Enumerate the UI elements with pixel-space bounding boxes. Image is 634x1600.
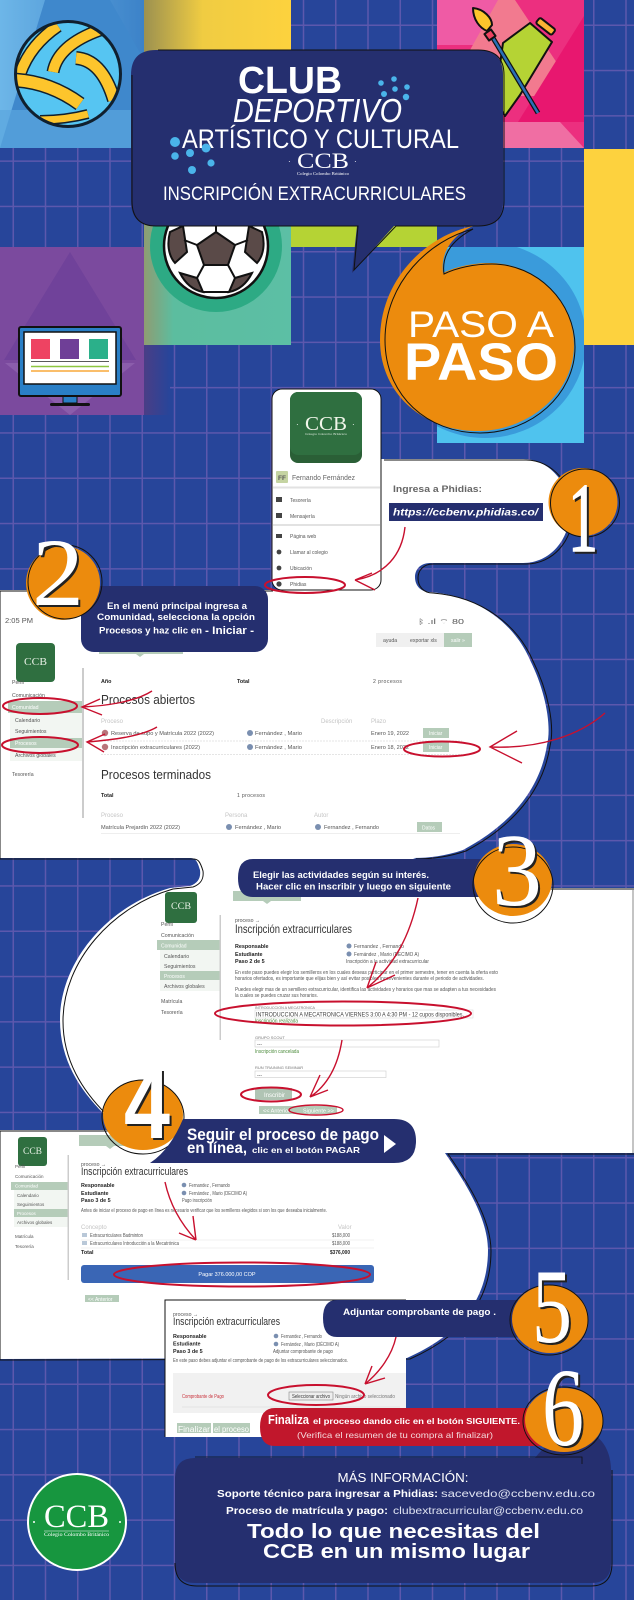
closing slogan: Todo lo que necesitas del — [247, 1521, 540, 1543]
footer contact panel — [175, 1430, 612, 1586]
finished processes: Proceso — [101, 813, 124, 819]
paso a paso bubble — [380, 226, 575, 433]
pay button: Pagar 376.000,00 COP — [198, 1272, 256, 1278]
upload box: Ningún archivo seleccionado — [335, 1394, 395, 1400]
step 2: screenshot: 2:05 PM — [5, 616, 33, 625]
step 6 number: 6 — [542, 1347, 584, 1470]
step 3: red marks — [215, 898, 471, 1115]
step 6: red instruction bar: (Verifica el resumen de tu compra al finalizar) — [297, 1430, 493, 1440]
sidebar: Matrícula — [161, 999, 182, 1005]
sidebar: Seguimientos — [15, 729, 47, 735]
step 6 number — [523, 1347, 603, 1472]
finished processes: 1 procesos — [237, 793, 265, 799]
payment details: Responsable — [81, 1183, 115, 1189]
step 5: red marks — [268, 1337, 396, 1405]
step 5: screenshot — [165, 1300, 406, 1437]
finished processes: Datos — [422, 826, 436, 832]
step 4 number: 4 — [124, 1048, 170, 1160]
form selects: RUN TRAINING SEMINAR — [255, 1065, 303, 1070]
CCB logo: CCB — [44, 1499, 109, 1535]
sidebar: Tesorería — [12, 772, 34, 778]
header speech bubble — [131, 50, 504, 273]
payment details: Paso 3 de 5 — [81, 1198, 111, 1204]
payment table: Extracurriculares Badminton — [90, 1233, 143, 1239]
finished processes: Fernandez , Fernando — [324, 825, 379, 831]
sidebar: Comunidad — [161, 944, 187, 950]
sidebar: Perfil — [12, 680, 24, 686]
icon: soccer ball — [164, 194, 268, 298]
step 2 number — [26, 519, 102, 628]
payment details: Fernández , Mario (DECIMO A) — [189, 1191, 247, 1197]
step 4: instruction bar: en línea, — [187, 1140, 247, 1157]
decorative dots — [170, 76, 410, 174]
step 4: red marks — [114, 1182, 370, 1286]
form header — [235, 918, 429, 965]
form selects: Inscripción cancelada — [255, 1049, 299, 1055]
sidebar: Tesorería — [15, 1244, 34, 1249]
phone logo: · — [352, 420, 355, 429]
contact lines — [217, 1489, 596, 1517]
sidebar: Tesorería — [161, 1010, 183, 1016]
form header: proceso → — [235, 918, 260, 924]
payment details — [81, 1162, 327, 1214]
payment details: Fernandez , Fernando — [189, 1183, 230, 1189]
open processes: Inscripción extracurriculares (2022) — [111, 745, 200, 751]
step 4: instruction bar — [150, 1119, 416, 1163]
sidebar: Archivos globales — [15, 753, 56, 759]
closing slogan — [247, 1521, 540, 1563]
contact heading: MÁS INFORMACIÓN: — [338, 1470, 468, 1485]
payment table: Concepto — [81, 1225, 107, 1231]
form selects: --- — [257, 1072, 262, 1078]
phone menu — [276, 497, 328, 588]
logo small — [16, 643, 55, 682]
closing slogan: CCB en un mismo lugar — [263, 1541, 530, 1563]
contact lines: clubextracurricular@ccbenv.edu.co — [393, 1506, 584, 1517]
sidebar: Comunicación — [15, 1174, 44, 1179]
step 4 number — [102, 1048, 184, 1162]
color block: teal — [144, 148, 291, 345]
step 1: phone screenshot — [272, 389, 381, 590]
step 3: screenshot — [157, 891, 498, 1114]
step 2: instruction box — [81, 586, 268, 652]
color block: lime — [291, 148, 437, 247]
step 2: instruction box: - Iniciar - — [205, 625, 254, 637]
icon: computer monitor — [19, 327, 121, 406]
sidebar: Procesos — [164, 974, 185, 980]
color block: light blue — [437, 247, 584, 443]
payment table: $188,000 — [332, 1241, 350, 1247]
step 3 number: 3 — [492, 813, 542, 928]
payment details: proceso → — [81, 1162, 106, 1168]
step 3 number — [473, 813, 553, 930]
contact lines: Soporte técnico para ingresar a Phidias: — [217, 1489, 438, 1500]
sidebar: Archivos globales — [164, 984, 205, 990]
sidebar: Calendario — [15, 718, 40, 724]
step 4 number: 4 — [126, 1050, 172, 1162]
phone menu: Llamar al colegio — [290, 550, 328, 556]
step 1 number — [548, 464, 620, 575]
sidebar: Archivos globales — [17, 1220, 53, 1225]
finish buttons — [177, 1423, 250, 1434]
open processes: Descripción — [321, 719, 352, 725]
CCB logo: Colegio Colombo Británico — [44, 1533, 110, 1538]
step 4: screenshot — [11, 1135, 374, 1303]
title: · — [354, 157, 357, 166]
step 5: screenshot: Fernandez , Fernando — [281, 1334, 322, 1340]
title: DEPORTIVO — [233, 92, 402, 129]
top buttons — [376, 633, 472, 647]
color block: shadow — [144, 345, 170, 415]
step 5: instruction bar — [323, 1300, 530, 1337]
step 6: red instruction bar: el proceso dando clic en el botón SIGUIENTE. — [313, 1416, 520, 1426]
step 4: instruction bar: Seguir el proceso de pago — [187, 1126, 379, 1144]
sidebar: Procesos — [15, 741, 37, 747]
step 2: instruction box: Comunidad, selecciona la opción — [97, 612, 255, 622]
sidebar: Comunidad — [12, 705, 39, 711]
step 1 number: 1 — [570, 466, 600, 575]
step 1: red marks — [265, 527, 405, 593]
payment table: Extracurriculares Introducción a la Mecatrónica — [90, 1241, 179, 1247]
payment table: Valor — [338, 1225, 352, 1231]
step 5: screenshot: Estudiante — [173, 1342, 201, 1348]
finished processes — [101, 768, 460, 834]
step 5: instruction bar: Adjuntar comprobante de pago . — [343, 1307, 496, 1317]
upload box: Seleccionar archivo — [292, 1394, 330, 1400]
sidebar: Perfil — [15, 1164, 25, 1169]
contact lines: Proceso de matrícula y pago: — [226, 1506, 388, 1517]
step 5: screenshot: Fernández , Mario (DÉCIMO A) — [281, 1341, 339, 1348]
payment details: Pago inscripción — [182, 1198, 212, 1204]
upload box: Comprobante de Pago — [182, 1394, 224, 1400]
finished processes: Total — [101, 793, 114, 799]
open processes: Fernández , Mario — [255, 731, 302, 737]
payment table — [81, 1225, 374, 1256]
finished processes: Fernández , Mario — [235, 825, 281, 831]
payment details: Inscripción extracurriculares — [81, 1166, 188, 1178]
step 5: screenshot: Paso 3 de 5 — [173, 1349, 203, 1355]
paso a paso bubble: PASO — [404, 333, 558, 392]
icon: paint tube and brush — [473, 8, 556, 116]
finished processes: Persona — [225, 813, 248, 819]
nav tab — [79, 1135, 125, 1149]
payment table: $376,000 — [330, 1250, 350, 1256]
pay button — [81, 1265, 374, 1283]
open processes: Plazo — [371, 719, 387, 725]
step 1: instructions: Ingresa a Phidias: — [393, 484, 482, 494]
open processes: Enero 18, 2022 — [371, 745, 409, 751]
form text: la cuales se puedes cruzar sus horarios. — [235, 993, 318, 999]
step 2: instruction box: En el menú principal ingresa a — [107, 601, 248, 611]
finish buttons: el proceso — [214, 1425, 250, 1434]
step 6: red instruction bar: Finaliza — [268, 1413, 310, 1427]
phone menu: Ubicación — [290, 566, 312, 572]
step 2: red marks — [2, 691, 605, 763]
top buttons: ayuda — [383, 638, 397, 644]
form text: Puedes elegir mas de un semillero extracurricular, identifica las actividades y horarios que mas se adapten a tus necesidades — [235, 987, 496, 993]
open processes: Año — [101, 679, 112, 685]
contact lines: sacevedo@ccbenv.edu.co — [441, 1489, 596, 1500]
sidebar: Calendario — [17, 1193, 39, 1198]
form header: Fernández , Mario (DECIMO A) — [354, 952, 419, 958]
phone logo: Colegio Colombo Británico — [305, 432, 347, 436]
form header: Inscripción extracurriculares — [235, 922, 352, 936]
phone menu: Mensajería — [290, 514, 315, 520]
form selects: INTRODUCCION A MECATRONICA VIERNES 3:00 A 4:30 PM - 12 cupos disponibles. — [256, 1012, 464, 1018]
step 2: screenshot: ᛒ .ıl ⌔ 80 — [418, 618, 464, 626]
phone menu: Phidias — [290, 582, 307, 588]
white flowing panel — [0, 459, 634, 1360]
sidebar: Comunidad — [15, 1184, 39, 1188]
upload box — [173, 1373, 406, 1413]
icon: volleyball — [14, 21, 121, 127]
step 5: screenshot: En este paso debes adjuntar el comprobante de pago de los extracurriculares seleccionados. — [173, 1358, 348, 1364]
phone user — [276, 471, 355, 483]
logo small — [165, 892, 197, 923]
step 5: screenshot: proceso → — [173, 1312, 198, 1318]
sidebar: Comunicación — [161, 933, 194, 939]
color block: yellow right — [584, 149, 634, 345]
step 1 number: 1 — [568, 464, 598, 573]
form header: Inscripción a la actividad extracurricular — [346, 959, 429, 965]
sidebar — [8, 668, 84, 818]
phone logo — [290, 392, 362, 463]
logo small — [18, 1137, 47, 1166]
step 3 number: 3 — [494, 815, 544, 930]
step 1: instructions — [389, 484, 543, 521]
top buttons: salir » — [451, 638, 465, 644]
open processes — [101, 679, 462, 754]
form header: Fernandez , Fernando — [354, 944, 404, 950]
form header: Responsable — [235, 944, 269, 950]
nav tab — [233, 891, 301, 904]
phone menu: Tesorería — [290, 498, 311, 504]
payment details: Antes de iniciar el proceso de pago en línea es necesario verificar que los semilleros elegidos si son los que deseaba inicialmente. — [81, 1208, 327, 1214]
step 5: screenshot: Responsable — [173, 1334, 207, 1340]
form buttons: Siguiente >> — [303, 1108, 334, 1114]
logo small: CCB — [24, 656, 47, 668]
step 2: screenshot — [5, 616, 472, 834]
open processes: Enero 19, 2022 — [371, 731, 409, 737]
open processes: Proceso — [101, 719, 124, 725]
step 3: instruction bar: Hacer clic en inscribir y luego en siguiente — [256, 882, 451, 892]
nav tab — [99, 650, 183, 657]
form buttons: Inscribir — [264, 1093, 285, 1099]
logo small: CCB — [23, 1146, 42, 1156]
form text: En este paso puedes elegir los semilleros en los cuales deseas participar en el primer semestre, tener en cuenta la oferta esto — [235, 970, 498, 976]
finished processes: Procesos terminados — [101, 768, 211, 782]
color block: blue — [0, 0, 144, 148]
title: Colegio Colombo Británico — [297, 171, 349, 176]
sidebar: Matrícula — [15, 1234, 34, 1239]
step 5 number: 5 — [534, 1250, 574, 1367]
finished processes: Autor — [314, 813, 328, 819]
back button — [85, 1295, 119, 1303]
step 3: instruction bar — [238, 859, 495, 897]
payment table: $188,000 — [332, 1233, 350, 1239]
title — [182, 60, 459, 176]
open processes: 2 procesos — [373, 679, 402, 685]
open processes: Reserva de cupo y Matrícula 2022 (2022) — [111, 731, 214, 737]
form buttons — [255, 1088, 337, 1114]
logo small: CCB — [171, 902, 191, 912]
form header: Estudiante — [235, 952, 263, 958]
sidebar: Procesos — [17, 1211, 37, 1216]
CCB logo — [28, 1474, 126, 1570]
sidebar: Perfil — [161, 922, 173, 928]
finished processes: Matrícula Prejardín 2022 (2022) — [101, 825, 180, 831]
sidebar — [11, 1155, 69, 1280]
form selects: --- — [257, 1042, 262, 1048]
form selects: Inscripción realizada — [255, 1018, 298, 1024]
title: CLUB — [238, 60, 342, 102]
paso a paso bubble: PASO A — [408, 304, 554, 345]
payment table: Total — [81, 1250, 94, 1256]
form text — [235, 970, 498, 999]
step 2: instruction box: Procesos y haz clic en — [99, 626, 202, 636]
color block: pink — [437, 0, 584, 148]
sidebar: Comunicación — [12, 693, 45, 699]
phone logo: CCB — [305, 413, 347, 435]
open processes: Fernández , Mario — [255, 745, 302, 751]
step 5: screenshot: Inscripción extracurriculares — [173, 1316, 280, 1328]
phone user: Fernando Fernández — [292, 475, 355, 482]
back button: << Anterior — [88, 1297, 113, 1303]
finish buttons: Finalizar — [178, 1425, 210, 1434]
step 6: red instruction bar — [260, 1408, 550, 1446]
top buttons: exportar xls — [410, 638, 437, 644]
step 3: instruction bar: Elegir las actividades según su interés. — [253, 870, 429, 881]
step 2 number: 2 — [32, 519, 84, 626]
open processes: Total — [237, 679, 250, 685]
title: ARTÍSTICO Y CULTURAL — [182, 124, 459, 154]
open processes: Procesos abiertos — [101, 693, 195, 707]
title: CCB — [297, 148, 349, 173]
subtitle: INSCRIPCIÓN EXTRACURRICULARES — [163, 182, 466, 205]
phone menu: Página web — [290, 534, 316, 540]
step 4: instruction bar: clic en el botón PAGAR — [252, 1145, 360, 1155]
step 1: instructions: https://ccbenv.phidias.co/ — [393, 508, 539, 518]
step 5: screenshot: Adjuntar comprobante de pago — [273, 1349, 333, 1355]
step 5 number — [510, 1248, 588, 1367]
sidebar: Seguimientos — [164, 964, 196, 970]
step 2 number: 2 — [34, 521, 86, 628]
color block: purple — [0, 247, 144, 415]
title: · — [288, 157, 291, 166]
sidebar — [157, 915, 221, 1040]
phone logo: · — [296, 420, 299, 429]
form header: Paso 2 de 5 — [235, 959, 265, 965]
step 6 number: 6 — [544, 1349, 586, 1472]
form buttons: << Anterior — [263, 1108, 290, 1114]
sidebar: Calendario — [164, 954, 189, 960]
form selects — [255, 1005, 473, 1078]
phone user: FF — [278, 475, 286, 482]
payment details: Estudiante — [81, 1191, 109, 1197]
open processes: Iniciar — [429, 745, 443, 751]
open processes: Iniciar — [429, 731, 443, 737]
sidebar: Seguimientos — [17, 1202, 45, 1207]
color block: yellow — [144, 0, 291, 148]
form selects: INTRODUCCION A MECATRONICA — [255, 1005, 315, 1010]
step 5 number: 5 — [532, 1248, 572, 1365]
form selects: GRUPO SCOUT — [255, 1035, 285, 1040]
form text: horarios ofertados, es importante que elijas bien y así evitar posibles inconvenientes durante el periodo de actividades. — [235, 976, 484, 982]
